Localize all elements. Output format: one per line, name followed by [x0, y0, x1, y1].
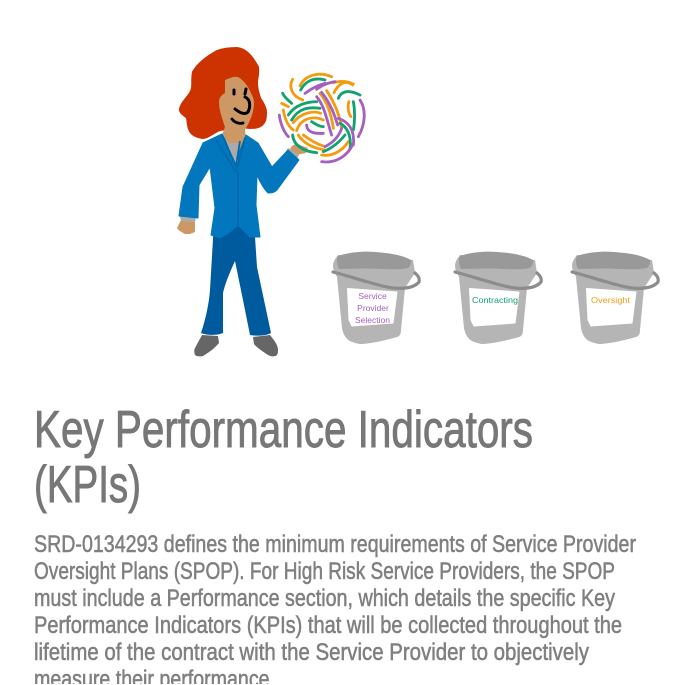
title: (KPIs) — [34, 455, 141, 513]
bucket label — [586, 288, 636, 326]
title: Key Performance Indicators — [34, 400, 533, 458]
illustration: woman in blue suit — [177, 48, 308, 356]
jacket lapels and seams — [216, 135, 245, 225]
bucket rim — [576, 252, 650, 269]
eyes, nose and mouth — [232, 89, 250, 123]
bucket label — [470, 288, 519, 326]
label text: Selection — [355, 315, 390, 325]
face and neck — [219, 77, 254, 155]
shirt — [227, 143, 238, 165]
hair — [180, 48, 266, 138]
icon: tangled ball of coloured strands — [279, 74, 364, 162]
bucket body — [572, 255, 654, 344]
bucket rim — [337, 252, 411, 269]
orange strands — [282, 74, 353, 155]
shoes — [194, 335, 278, 356]
bucket body — [455, 255, 537, 344]
bucket handle — [333, 272, 419, 288]
hand left — [177, 220, 195, 234]
bucket rim — [459, 252, 533, 269]
purple strands — [279, 82, 364, 162]
bucket handle — [572, 272, 658, 288]
bucket: Service Provider Selection — [333, 252, 419, 344]
label text: Provider — [357, 303, 389, 313]
bucket handle — [455, 272, 541, 288]
label text: Contracting — [472, 295, 518, 305]
body paragraph — [34, 531, 636, 685]
label text: Oversight — [591, 295, 631, 305]
green strands — [283, 79, 360, 153]
body paragraph: lifetime of the contract with the Service Provider to objectively — [34, 639, 589, 666]
label text: Service — [358, 291, 387, 301]
bucket: Contracting — [455, 252, 541, 344]
bucket label — [348, 288, 397, 326]
bucket: Oversight — [572, 252, 658, 344]
hand right — [289, 144, 308, 155]
jacket — [179, 134, 299, 238]
bucket body — [333, 255, 415, 344]
label text — [355, 291, 390, 325]
trousers — [201, 222, 271, 336]
title — [34, 400, 533, 513]
